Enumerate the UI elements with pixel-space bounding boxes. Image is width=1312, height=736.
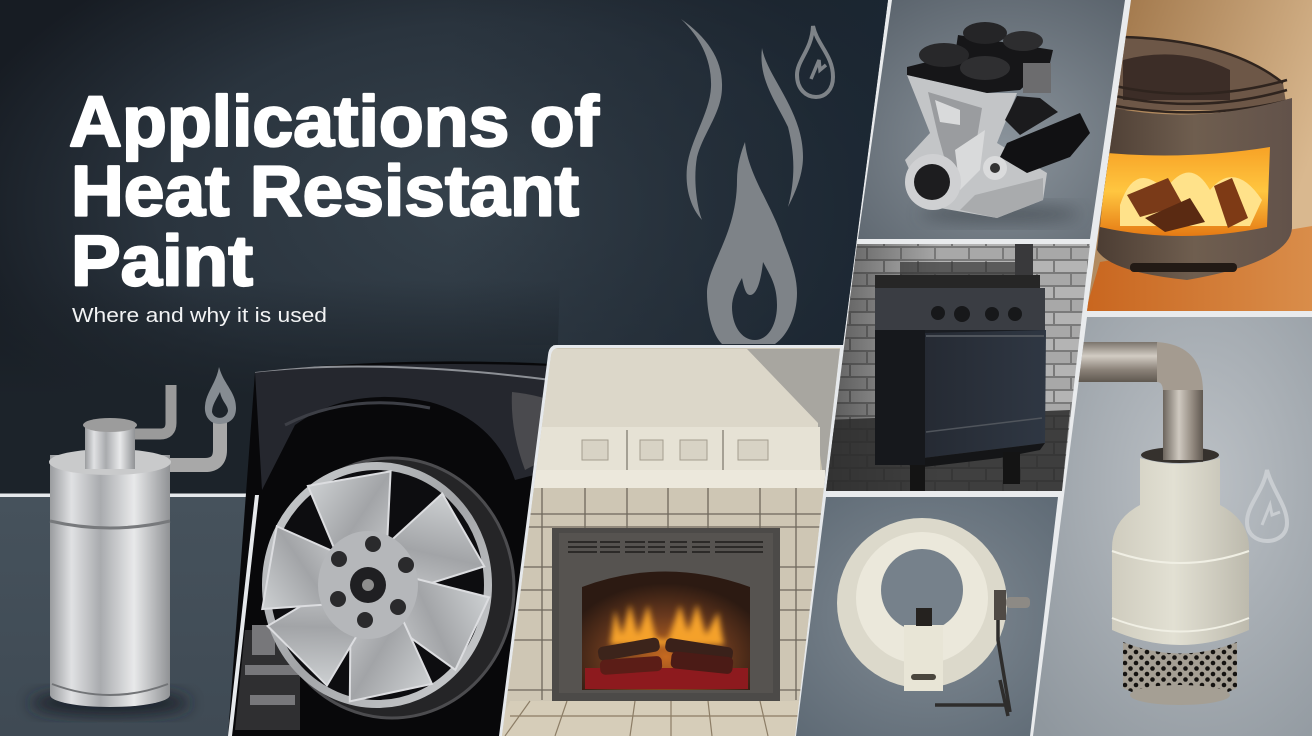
panel: dark title background <box>0 0 888 736</box>
oven body <box>925 330 1044 333</box>
flue pipe <box>1078 342 1158 382</box>
panel: white boiler <box>1030 315 1312 736</box>
canister body <box>50 455 170 695</box>
mantel band <box>525 427 820 471</box>
oven knobs <box>931 306 945 320</box>
mesh strainer <box>1123 642 1237 702</box>
logs <box>597 637 661 661</box>
car body <box>255 364 553 490</box>
brake blocks <box>235 630 300 730</box>
stove logs <box>1127 178 1183 217</box>
wheel spokes <box>262 471 489 701</box>
stove body <box>1097 98 1292 280</box>
oven pipe <box>1015 244 1033 275</box>
plaster wall <box>745 349 843 490</box>
stove glass window with fire <box>1100 147 1270 236</box>
icon: large decorative flames <box>681 19 833 344</box>
panel: engine <box>850 0 1130 240</box>
divider: fireplace frame <box>499 345 846 736</box>
divider: wheel left edge <box>228 495 259 736</box>
stove vent <box>1130 263 1237 272</box>
panel: metal canister <box>30 367 236 715</box>
engine caps <box>963 22 1007 44</box>
stove top grill <box>1110 37 1287 110</box>
title: Paint <box>71 222 253 302</box>
engine pulley <box>905 154 961 210</box>
title: Applications of <box>69 83 599 162</box>
panel: ring burner <box>790 495 1065 736</box>
canister top valve <box>130 385 171 434</box>
boiler body <box>1112 458 1249 645</box>
title: Heat Resistant <box>71 152 579 232</box>
oven base and legs <box>910 443 1045 467</box>
engine block <box>905 75 1047 218</box>
stand and valve <box>935 600 1010 716</box>
panel: black oven <box>820 240 1095 495</box>
soot shading <box>826 410 1070 491</box>
firebox opening <box>582 572 750 690</box>
tile surround <box>500 488 825 703</box>
subtitle: Where and why it is used <box>72 305 327 327</box>
boiler collar <box>1141 447 1219 463</box>
panel: car wheel <box>228 345 558 736</box>
floor tiles <box>502 703 799 735</box>
oven door <box>923 330 1046 458</box>
divider line <box>0 494 256 497</box>
firebox vents <box>568 542 763 552</box>
flames <box>610 604 724 645</box>
icon: outline flame <box>1247 470 1287 541</box>
engine intake <box>1000 113 1090 173</box>
panel: wood stove <box>1085 0 1312 312</box>
title <box>69 83 599 302</box>
ring <box>837 518 1007 688</box>
mantel hood <box>530 349 818 430</box>
embers <box>585 668 748 689</box>
panel: fireplace <box>495 345 845 736</box>
wheel hub and bolts <box>350 567 386 603</box>
firebox frame <box>552 528 780 701</box>
canister side tube <box>168 422 220 465</box>
wheel <box>262 458 514 718</box>
control box <box>904 625 943 691</box>
icon: small flame <box>205 367 236 424</box>
stove floor <box>1085 226 1312 312</box>
